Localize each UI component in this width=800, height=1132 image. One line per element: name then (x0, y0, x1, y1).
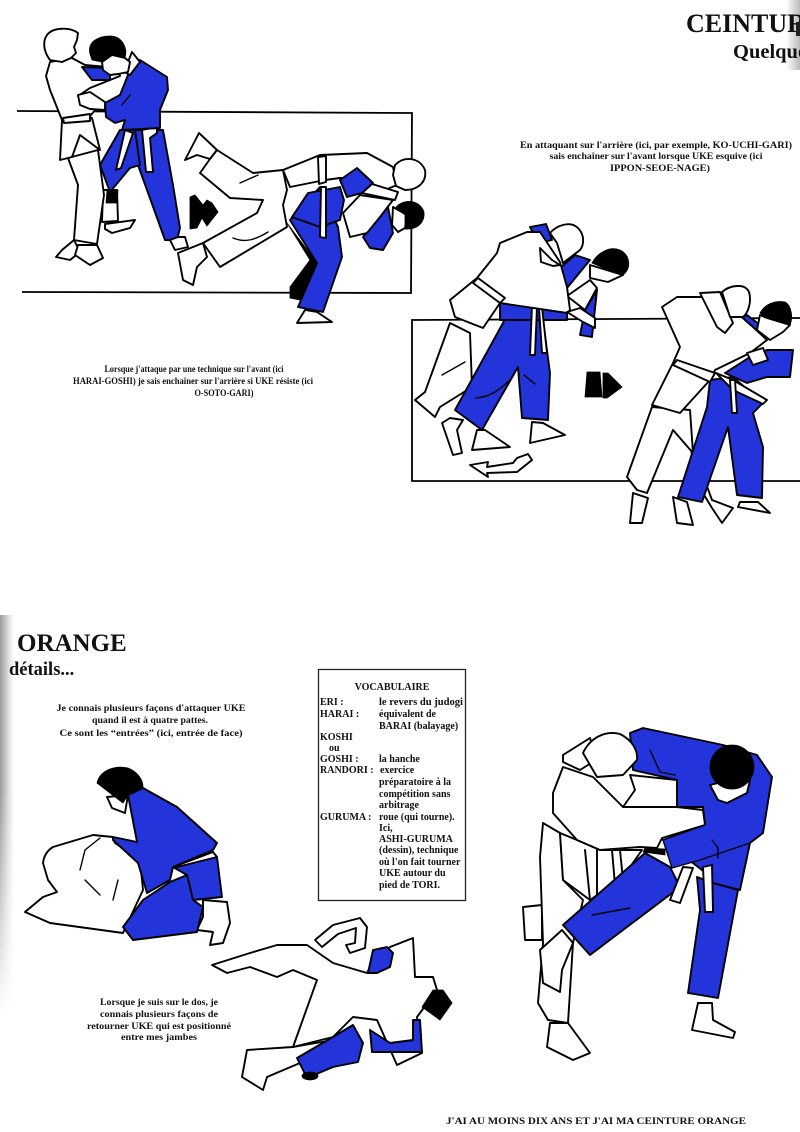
uke white on all fours (25, 835, 143, 933)
caption: harai-goshi: HARAI-GOSHI) je sais enchaîner sur l'arrière si UKE résiste (ici (73, 376, 313, 386)
caption: sur le dos: connais plusieurs façons de (100, 1009, 218, 1019)
tori head (710, 745, 754, 803)
vocabulary terms: GURUMA : (320, 812, 371, 823)
section subtitle: details: détails... (9, 660, 74, 680)
tori blue shoulder (738, 315, 760, 333)
vocabulary terms: Ici, (379, 823, 393, 834)
caption: sur le dos: Lorsque je suis sur le dos, je (100, 997, 218, 1007)
vocabulary terms: HARAI : (320, 709, 359, 720)
tori blue sleeve and arm (320, 168, 398, 250)
vocabulary terms: ASHI-GURUMA (379, 834, 454, 845)
tori foot right (738, 502, 770, 513)
tori blue hips (297, 1025, 363, 1078)
tori blue jacket (113, 788, 217, 893)
judo figures: ko-uchi-gari (415, 224, 629, 477)
tori head (422, 990, 452, 1020)
tori head (97, 767, 143, 813)
uke belt (673, 360, 715, 382)
caption: ko-uchi-gari: En attaquant sur l'arrière (ici, par exemple, KO-UCHI-GARI) (520, 140, 792, 150)
caption: ko-uchi-gari: IPPON-SEOE-NAGE) (610, 163, 710, 173)
curved arrow (315, 918, 367, 953)
footer caption: J'AI AU MOINS DIX ANS ET J'AI MA CEINTURE ORANGE (446, 1117, 746, 1127)
judo figures: ashi-guruma (523, 728, 772, 1060)
tori blue lines (592, 750, 718, 915)
caption: ko-uchi-gari: sais enchaîner sur l'avant lorsque UKE esquive (ici (550, 151, 763, 161)
top-edge page shadow mark (796, 22, 800, 36)
tori raised blue leg (563, 853, 680, 955)
caption: harai-goshi (73, 364, 313, 398)
caption: sur le dos: entre mes jambes (121, 1032, 198, 1042)
judo figures: ground turnover (212, 918, 452, 1090)
uke foot (547, 1023, 590, 1060)
judo figures: harai-goshi (44, 29, 188, 265)
vocabulary terms: où l'on fait tourner (379, 857, 461, 868)
vocabulary terms: RANDORI : (320, 765, 374, 776)
vocabulary terms: le revers du judogi (379, 697, 463, 708)
tori belt (173, 852, 217, 867)
vocabulary terms: GOSHI : (320, 754, 359, 765)
uke hand detail (80, 838, 118, 900)
tori blue jacket part (370, 1020, 422, 1052)
vocabulary terms: UKE autour du (379, 868, 446, 879)
tori blue standing (78, 36, 188, 250)
panel: vocabulaire (318, 670, 466, 900)
tori head (757, 301, 792, 340)
uke white standing (44, 29, 135, 265)
uke white legs (538, 823, 583, 1023)
tori blue thigh (173, 857, 222, 900)
uke hooked foot (540, 930, 573, 992)
uke white torso and arm (212, 938, 437, 1065)
vocabulary terms: compétition sans (379, 789, 450, 800)
section title: orange: ORANGE (17, 630, 127, 657)
vocabulary terms: ERI : (320, 697, 344, 708)
uke back leg (415, 323, 472, 417)
vocabulary terms: roue (qui tourne). (379, 812, 455, 823)
vocabulary terms (320, 697, 463, 891)
caption: ko-uchi-gari (520, 140, 792, 173)
panel heading: VOCABULAIRE (355, 682, 430, 693)
caption: quatre pattes (56, 703, 246, 738)
tori foot shadow (302, 1072, 318, 1080)
uke white jacket (450, 224, 595, 328)
caption: harai-goshi: Lorsque j'attaque par une technique sur l'avant (ici (104, 364, 284, 374)
tori blue torso (500, 255, 597, 355)
uke white legs (242, 1040, 333, 1090)
tori blue trousers (678, 377, 763, 502)
vocabulary terms: exercice (380, 765, 415, 776)
vocabulary terms: KOSHI (320, 732, 353, 743)
vocabulary terms: BARAI (balayage) (379, 721, 458, 732)
tori feet (673, 497, 693, 525)
arrow: black double chevron (190, 195, 218, 229)
caption: harai-goshi: O-SOTO-GARI) (194, 388, 254, 398)
judo figures: o-soto-gari (178, 133, 425, 323)
uke white jacket back (652, 297, 767, 413)
tori standing blue leg (688, 877, 738, 998)
tori blue jacket (630, 728, 772, 890)
vocabulary terms: (dessin), technique (379, 845, 459, 856)
tori head (590, 249, 629, 282)
tori blue jacket (292, 187, 344, 227)
uke white legs (627, 407, 733, 523)
vocabulary terms: arbitrage (379, 800, 420, 811)
vocabulary terms: préparatoire à la (379, 777, 451, 788)
black belt (643, 848, 665, 855)
tori belt (716, 373, 767, 413)
caption: sur le dos: retourner UKE qui est positionné (87, 1021, 231, 1031)
tori blue jacket upper (725, 350, 793, 383)
tori head (392, 201, 424, 232)
tori foot (197, 900, 230, 945)
caption: quatre pattes: quand il est à quatre pattes. (92, 715, 208, 725)
uke white skirt and belt (560, 833, 642, 900)
tori blue legs (290, 187, 342, 312)
judo figures: ippon-seoe-nage (627, 286, 793, 525)
judo figures: entry on four legs (25, 767, 230, 945)
caption: quatre pattes: Je connais plusieurs façons d'attaquer UKE (56, 703, 246, 713)
tori blue knee (123, 875, 203, 940)
vocabulary terms: pied de TORI. (379, 880, 441, 891)
caption: quatre pattes: Ce sont les “entrées” (ici, entrée de face) (60, 728, 243, 738)
tori belt ribbons (670, 865, 713, 912)
vocabulary terms: la hanche (379, 754, 420, 765)
uke white thrown (178, 133, 397, 285)
tatami mat: second scene (412, 318, 800, 481)
uke arm and head (700, 286, 750, 333)
tori standing foot (692, 1003, 735, 1038)
uke head (393, 159, 425, 190)
tori foot (297, 310, 332, 323)
vocabulary terms: équivalent de (379, 709, 437, 720)
tatami mat: first scene (17, 111, 412, 293)
uke collar (623, 775, 677, 807)
tori blue trousers (455, 305, 550, 430)
uke white back foot (523, 905, 542, 940)
uke white torso (553, 767, 705, 850)
uke hand and head (563, 733, 637, 777)
tori hand (747, 348, 768, 365)
arrow: black right (585, 372, 622, 398)
tori blue shoulder (368, 947, 393, 973)
vocabulary terms: ou (329, 743, 340, 754)
curved arrow (470, 454, 532, 477)
fold lines (442, 362, 535, 398)
tori feet (442, 418, 565, 455)
tori blue back leg shadow (287, 223, 317, 300)
caption: sur le dos (87, 997, 231, 1042)
uke belt ribbons (585, 850, 623, 900)
tori sleeve (663, 795, 763, 868)
